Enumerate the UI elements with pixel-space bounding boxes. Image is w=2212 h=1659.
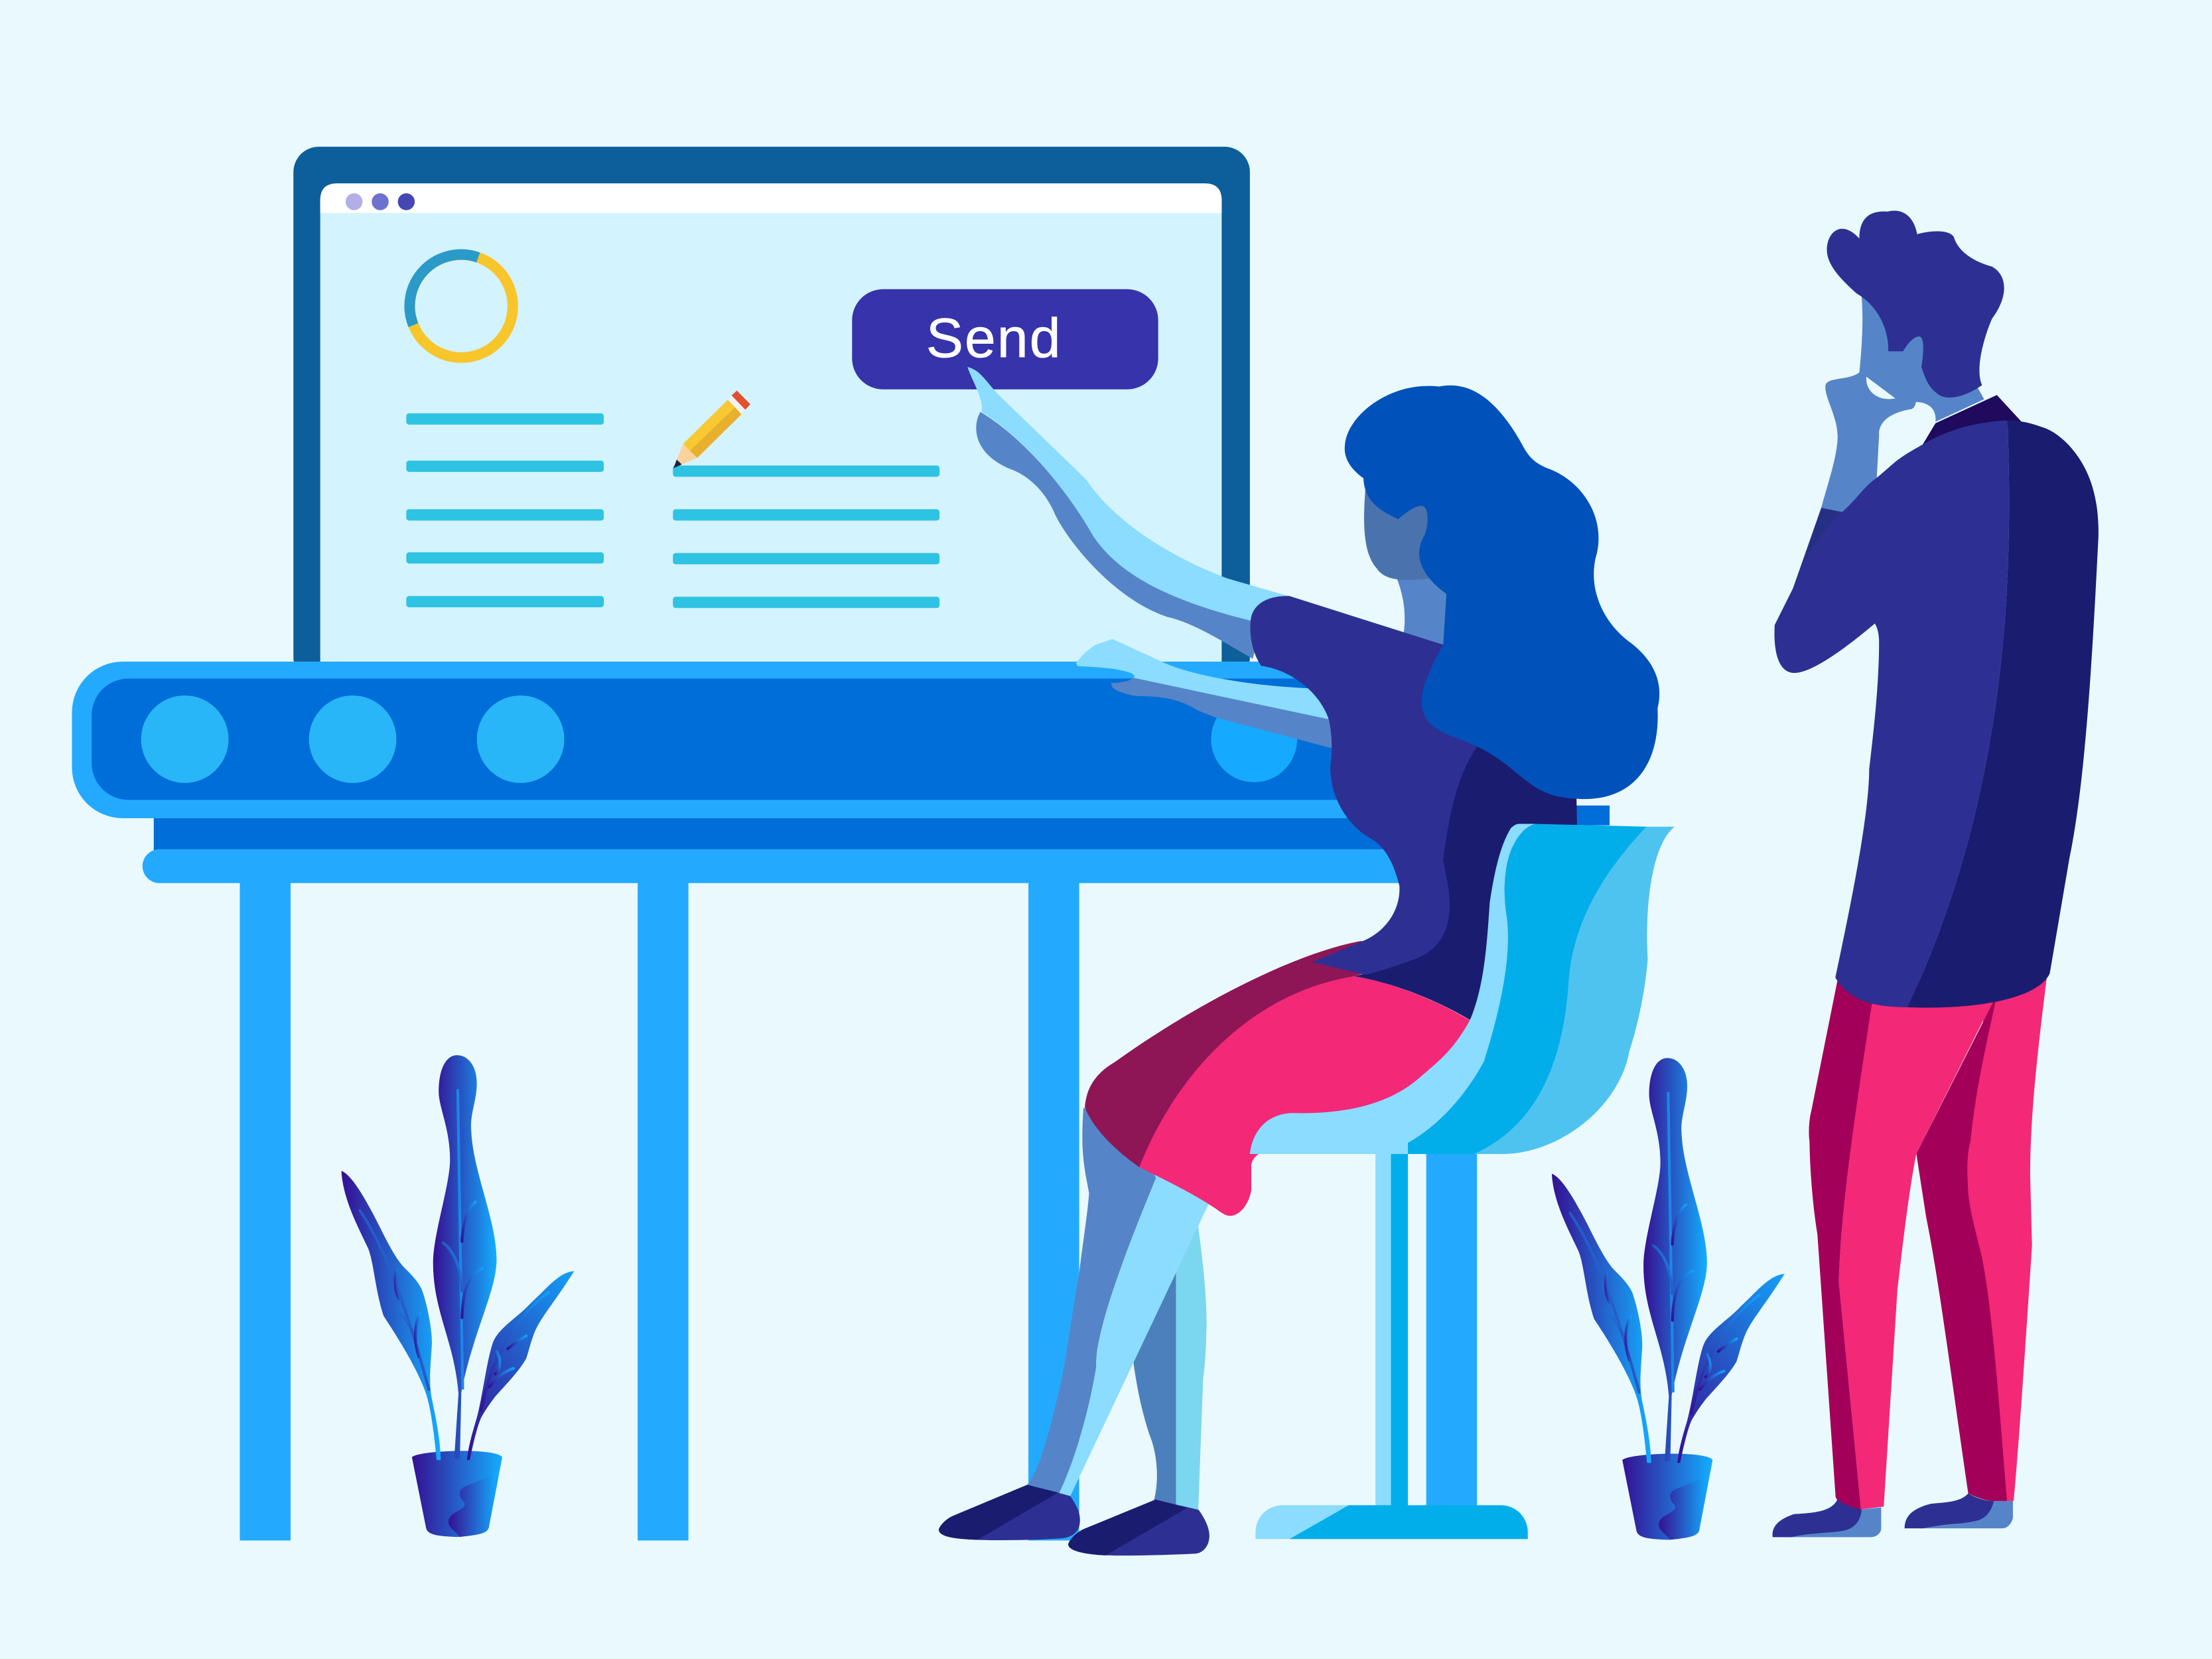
screen [320, 183, 1221, 677]
monitor [293, 147, 1250, 683]
jacket shadow [1907, 421, 2099, 1007]
text lines right column [673, 466, 939, 608]
window dots [346, 193, 415, 210]
plant right [1552, 1058, 1785, 1540]
man [1773, 211, 2099, 1537]
pants [1809, 974, 2047, 1510]
woman [939, 367, 1659, 1555]
left shoe [1773, 1500, 1881, 1537]
small rear block [1576, 806, 1610, 826]
desk top [143, 811, 1404, 883]
right shoe [1905, 1493, 2013, 1528]
chair stem [1375, 1150, 1477, 1506]
collar [1923, 395, 2022, 445]
chair base [1255, 1505, 1528, 1539]
neck and hand [1821, 295, 1984, 519]
send button: Send [926, 307, 1062, 369]
donut chart [409, 255, 513, 358]
shirt [1250, 596, 1482, 975]
text lines left column [406, 413, 604, 607]
front leg [1027, 1108, 1216, 1496]
chair [1250, 824, 1675, 1539]
icon: pencil [673, 391, 750, 469]
rear leg [1133, 1222, 1207, 1510]
send button [852, 289, 1158, 390]
hair [1827, 211, 2004, 397]
jacket [1774, 421, 2009, 1007]
desk legs [240, 875, 1079, 1540]
chair seat right [1467, 827, 1675, 1154]
desk [72, 662, 1610, 1540]
sleeve cuff [1793, 508, 1842, 588]
face [1364, 486, 1446, 580]
arm on the panel [1076, 639, 1340, 749]
torso shadow [1354, 741, 1577, 1020]
control panel [72, 662, 1397, 818]
hair [1345, 386, 1659, 799]
plant left [342, 1055, 574, 1537]
neck [1394, 571, 1453, 646]
arm pointing at button [967, 367, 1291, 659]
shoe rear [1068, 1500, 1210, 1555]
skirt [1085, 941, 1474, 1216]
shoe front [939, 1484, 1080, 1540]
monitor frame [293, 147, 1250, 683]
chair seat left [1250, 824, 1535, 1154]
chair seat middle [1408, 824, 1646, 1154]
browser title bar [320, 183, 1221, 213]
